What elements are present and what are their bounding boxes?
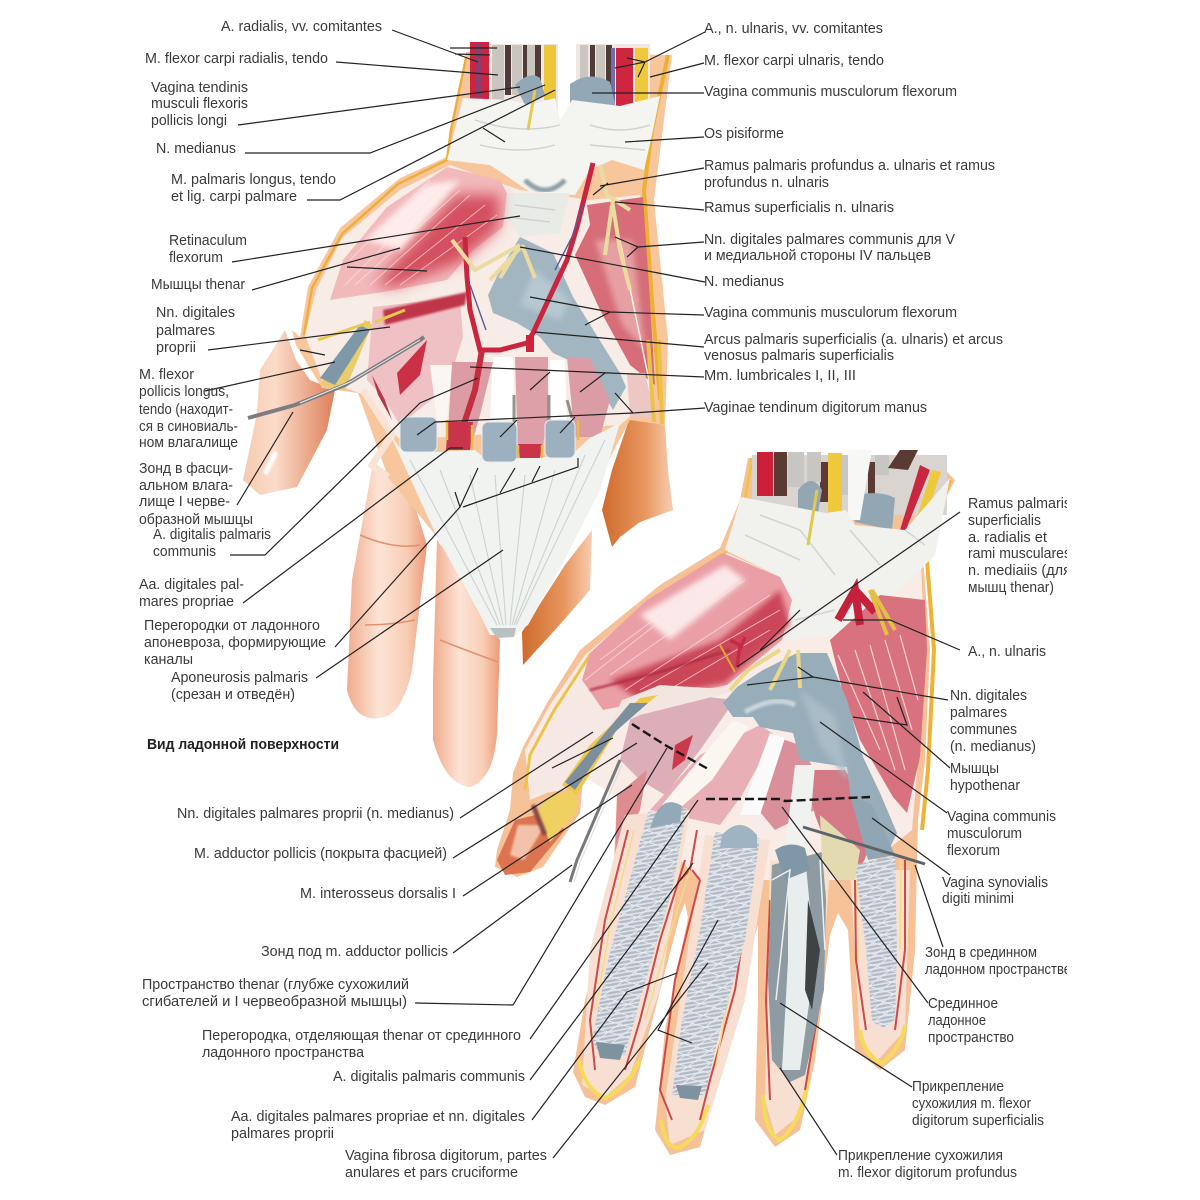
label: upper right: A., n. ulnaris, vv. comitantes <box>704 21 883 37</box>
label: lower right: superficialis <box>968 513 1041 529</box>
label: lower right: hypothenar <box>950 778 1020 794</box>
labels <box>139 19 1071 1181</box>
palm pale fascia <box>305 165 650 440</box>
sheath: ring finger opened <box>768 852 826 1082</box>
label: lower right: Прикрепление сухожилия <box>838 1148 1003 1164</box>
label: upper left: mares propriae <box>139 594 234 610</box>
label: upper left: апоневроза, формирующие <box>144 635 326 651</box>
white band along aponeurosis edge <box>363 390 392 477</box>
label: lower left: Зонд под m. adductor pollicis <box>261 944 448 960</box>
illustration: palm with aponeurosis (upper hand) <box>243 40 673 787</box>
label: lower left: ладонного пространства <box>202 1045 365 1061</box>
label: lower left: Пространство thenar (глубже сухожилий <box>142 977 409 993</box>
label: upper left: tendo (находит- <box>139 402 233 418</box>
label: upper left: Aa. digitales pal- <box>139 577 244 593</box>
label: lower right: ладонное <box>928 1013 986 1029</box>
label: upper left: Nn. digitales <box>156 305 235 321</box>
adductor muscle and cut <box>367 297 463 425</box>
label: lower left: сгибателей и I червеобразной мышцы) <box>142 994 407 1010</box>
hand skin outline <box>495 458 955 1155</box>
label: upper right: profundus n. ulnaris <box>704 175 829 191</box>
label: upper right: Ramus superficialis n. ulnaris <box>704 200 894 216</box>
thumb <box>243 330 335 495</box>
finger vessels red <box>590 830 905 1120</box>
illustration: lower hand with tendon sheaths <box>495 450 955 1155</box>
label: lower left: A. digitalis palmaris communis <box>333 1069 525 1085</box>
carpal ligament <box>725 478 950 640</box>
palmar arteries <box>455 163 593 445</box>
leader lines <box>205 30 960 1158</box>
yellow fat line <box>525 458 752 790</box>
label: lower left: M. interosseus dorsalis I <box>300 886 456 902</box>
arteries at wrist lower <box>838 590 875 625</box>
label: lower right: n. mediaiis (для <box>968 563 1071 579</box>
sheath: little finger <box>855 855 897 1028</box>
label: lower right: Мышцы <box>950 761 999 777</box>
label: upper left: Мышцы thenar <box>151 277 245 293</box>
heading: palmar surface view: Вид ладонной поверхности <box>147 737 339 753</box>
palm common sheath <box>488 237 626 410</box>
label: upper left: лище I черве- <box>139 494 230 510</box>
label: upper left: ном влагалище <box>139 435 238 451</box>
label: upper left: pollicis longus, <box>139 384 229 400</box>
index finger <box>347 463 427 718</box>
label: lower right: ладонном пространстве <box>925 962 1071 978</box>
label: lower right: Nn. digitales <box>950 688 1027 704</box>
wrist tendons lower <box>752 450 947 534</box>
label: lower right: a. radialis et <box>968 530 1047 546</box>
label: lower right: communes <box>950 722 1017 738</box>
label: lower right: palmares <box>950 705 1007 721</box>
label: lower right: мышц thenar) <box>968 580 1054 596</box>
label: upper left: Aponeurosis palmaris <box>171 670 308 686</box>
thumb <box>497 812 565 875</box>
label: lower right: Ramus palmaris <box>968 496 1071 512</box>
midpalmar space <box>820 815 860 880</box>
common flexor sheath lower <box>723 653 897 858</box>
label: upper right: Mm. lumbricales I, II, III <box>704 368 856 384</box>
hypothenar muscles <box>575 197 655 385</box>
label: upper left: palmares <box>156 323 215 339</box>
finger tendons and lumbricals <box>430 340 662 458</box>
label: upper right <box>704 21 1003 416</box>
label: upper right: Vagina communis musculorum flexorum <box>704 305 957 321</box>
label: upper left: ся в синовиаль- <box>139 419 238 435</box>
label: lower left: anulares et pars cruciforme <box>345 1165 518 1181</box>
sheath: index finger <box>592 808 687 1055</box>
label: upper left: каналы <box>144 652 193 668</box>
label: lower left: Nn. digitales palmares proprii (n. medianus) <box>177 806 454 822</box>
ring finger <box>522 530 592 665</box>
label: lower right: m. flexor digitorum profundus <box>838 1165 1017 1181</box>
label: lower right: rami musculares <box>968 546 1071 562</box>
label: upper left: flexorum <box>169 250 223 266</box>
label: upper left <box>139 19 382 703</box>
label: upper left: proprii <box>156 340 196 356</box>
label: upper left: Зонд в фасци- <box>139 461 233 477</box>
label: upper left: (срезан и отведён) <box>171 687 295 703</box>
label: upper right: и медиальной стороны IV пальцев <box>704 248 931 264</box>
digital vessels between sheaths <box>446 422 542 458</box>
label: upper right: Ramus palmaris profundus a. ulnaris et ramus <box>704 158 995 174</box>
thenar muscles <box>330 167 507 300</box>
thenar muscle lower <box>582 553 792 710</box>
label: upper left: M. palmaris longus, tendo <box>171 172 336 188</box>
probe in thumb <box>248 337 424 418</box>
middle finger <box>433 540 500 787</box>
label: lower left <box>142 806 547 1181</box>
label: lower right: flexorum <box>947 843 1000 859</box>
label: lower right: пространство <box>928 1030 1014 1046</box>
probes <box>803 827 925 864</box>
label: upper left: M. flexor <box>139 367 194 383</box>
label: upper left: A. radialis, vv. comitantes <box>221 19 382 35</box>
label: upper left: Vagina tendinis <box>151 80 248 96</box>
label: lower left: Перегородка, отделяющая thenar от срединного <box>202 1028 521 1044</box>
label: upper right: Nn. digitales palmares communis для V <box>704 232 955 248</box>
label: upper left: A. digitalis palmaris <box>153 527 271 543</box>
hypothenar lower <box>830 595 927 813</box>
adductor fascia <box>620 695 735 795</box>
digital nerves <box>452 165 630 290</box>
finger bed pale <box>582 810 910 1145</box>
label: upper left: M. flexor carpi radialis, tendo <box>145 51 328 67</box>
median nerve branches lower <box>730 650 800 690</box>
label: upper left: Перегородки от ладонного <box>144 618 320 634</box>
label: lower right: Vagina synovialis <box>942 875 1048 891</box>
label: upper left: et lig. carpi palmare <box>171 189 297 205</box>
label: upper left: pollicis longi <box>151 113 227 129</box>
label: lower left: Vagina fibrosa digitorum, partes <box>345 1148 547 1164</box>
little finger <box>602 417 673 547</box>
label: upper right: Vaginae tendinum digitorum manus <box>704 400 927 416</box>
label: lower left: M. adductor pollicis (покрыта фасцией) <box>194 846 447 862</box>
label: lower left: palmares proprii <box>231 1126 334 1142</box>
palm pale base <box>525 545 925 880</box>
label: lower right: Зонд в срединном <box>925 945 1037 961</box>
label: lower right: Прикрепление <box>912 1079 1004 1095</box>
label: lower right: digitorum superficialis <box>912 1113 1044 1129</box>
label: lower right <box>838 496 1071 1181</box>
label: upper right: Arcus palmaris superficialis (a. ulnaris) et arcus <box>704 332 1003 348</box>
wrist sheaths <box>515 75 616 108</box>
palm skin band <box>292 52 672 635</box>
tendons and lumbricals lower <box>650 720 880 865</box>
label: upper left: N. medianus <box>156 141 236 157</box>
aponeurosis palmaris <box>390 423 620 635</box>
label: lower right: digiti minimi <box>942 891 1014 907</box>
aponeurosis tip <box>490 628 516 638</box>
pink muscle at thumb base <box>615 770 647 860</box>
label: lower right: Vagina communis <box>947 809 1056 825</box>
sheath: middle finger <box>672 832 760 1095</box>
label: upper left: Retinaculum <box>169 233 247 249</box>
label: upper left: musculi flexoris <box>151 96 248 112</box>
dashed lines <box>632 724 870 801</box>
label: lower right: A., n. ulnaris <box>968 644 1046 660</box>
label: lower left: Aa. digitales palmares propriae et nn. digitales <box>231 1109 525 1125</box>
label: upper right: Vagina communis musculorum flexorum <box>704 84 957 100</box>
label: upper left: образной мышцы <box>139 512 253 528</box>
label: upper left: альном влага- <box>139 478 233 494</box>
thumb sheath and nerves <box>320 320 372 390</box>
blue finger sheaths <box>400 417 575 462</box>
label: upper right: M. flexor carpi ulnaris, tendo <box>704 53 884 69</box>
label: upper left: communis <box>153 544 216 560</box>
finger nerves <box>596 830 901 1070</box>
retinaculum ligament <box>447 96 660 195</box>
label: lower right: сухожилия m. flexor <box>912 1096 1031 1112</box>
label: lower right: musculorum <box>947 826 1022 842</box>
label: upper right: Os pisiforme <box>704 126 784 142</box>
finger tips yellow <box>579 1025 905 1148</box>
label: lower right: (n. medianus) <box>950 739 1036 755</box>
wrist tendons and vessels <box>470 40 650 160</box>
label: lower right: Срединное <box>928 996 998 1012</box>
label: upper right: venosus palmaris superficialis <box>704 348 894 364</box>
label: upper right: N. medianus <box>704 274 784 290</box>
thumb sheath <box>562 695 658 795</box>
